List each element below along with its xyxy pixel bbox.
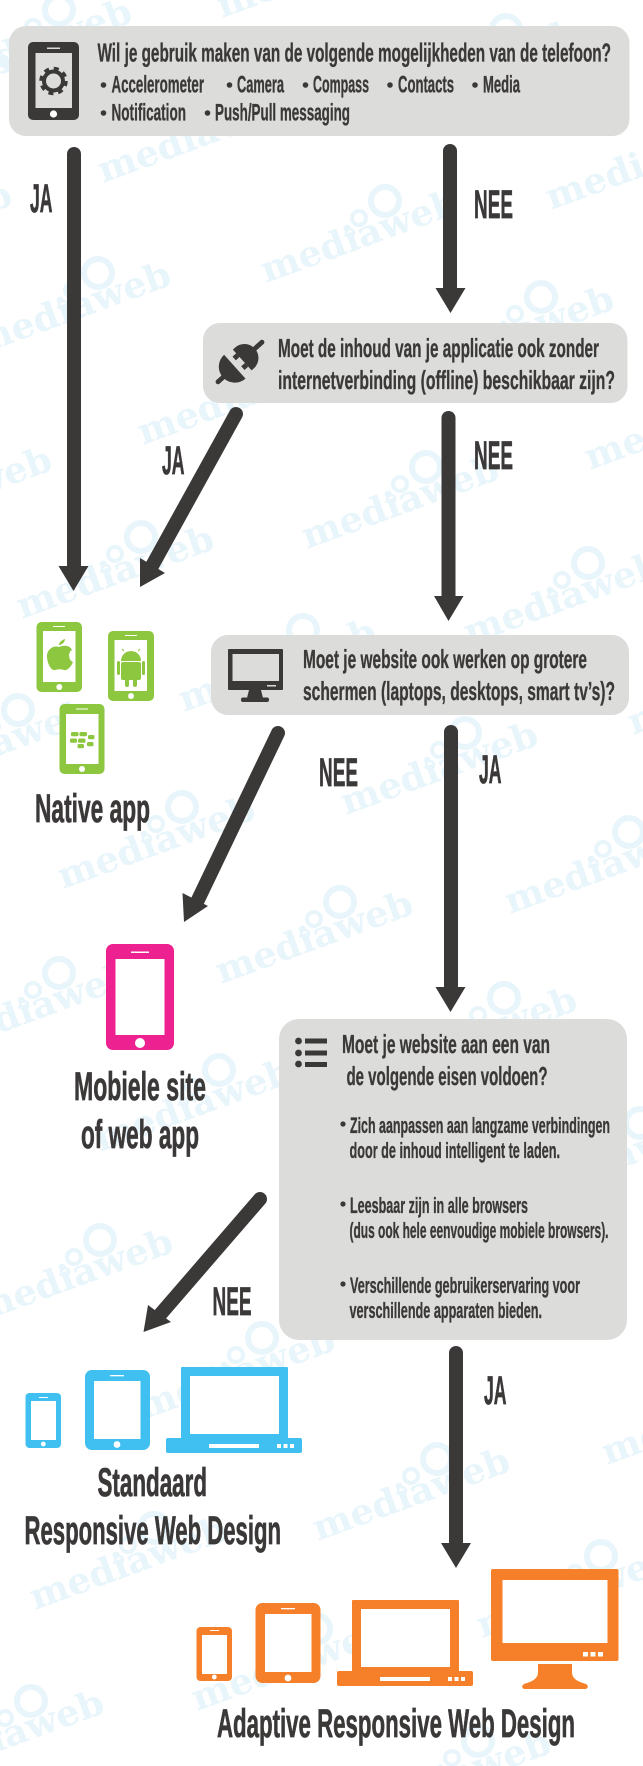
text: larger screens question — [303, 644, 615, 706]
label: Mobiele site of web app — [74, 1065, 206, 1157]
panel: phone features question — [9, 26, 630, 136]
text: JA — [484, 1369, 506, 1413]
arrow: JA to requirements question — [436, 725, 466, 1012]
group: standard responsive web design — [24, 1367, 302, 1553]
watermark pattern: mediaweb logos: mediaweb — [376, 10, 585, 120]
label: Standaard Responsive Web Design — [24, 1461, 281, 1553]
watermark pattern: mediaweb logos: mediaweb — [92, 81, 301, 191]
panel: offline question — [203, 323, 628, 403]
watermark pattern: mediaweb logos: mediaweb — [255, 181, 464, 291]
icon: blue phone — [26, 1393, 61, 1448]
arrow: NEE diagonal to mobile site — [182, 733, 278, 922]
icon: list — [295, 1038, 327, 1067]
icon: BlackBerry phone — [60, 704, 104, 774]
watermark pattern: mediaweb logos: mediaweb — [89, 1050, 298, 1160]
label: Standaard Responsive Web Design: Responsive Web Design — [24, 1509, 281, 1553]
watermark pattern: mediaweb logos: mediaweb — [307, 1439, 516, 1549]
panel: requirements question — [279, 1019, 627, 1340]
icon: orange tablet — [256, 1603, 320, 1683]
watermark pattern: mediaweb logos: mediaweb — [411, 277, 620, 387]
icon: blue tablet — [85, 1370, 150, 1450]
icon: plug — [206, 329, 274, 395]
text: NEE — [474, 183, 513, 227]
group: native app — [35, 622, 154, 831]
text: requirement slow connections — [340, 1113, 610, 1163]
text: requirement different experience — [340, 1273, 580, 1323]
arrow: NEE diagonal to standard responsive — [144, 1199, 260, 1332]
list: phone features: Camera — [237, 72, 284, 99]
icon: orange phone — [196, 1627, 232, 1681]
watermark pattern: mediaweb logos: mediaweb — [52, 787, 261, 897]
list: phone features: Accelerometer — [112, 72, 204, 99]
text: requirement all browsers — [340, 1193, 608, 1243]
text: JA — [479, 748, 502, 792]
watermark pattern: mediaweb logos: mediaweb — [186, 1609, 395, 1719]
arrow: JA diagonal to native app — [140, 414, 236, 587]
arrow: NEE to screens question — [434, 411, 464, 621]
icon: phone with gear — [28, 42, 79, 120]
label: Mobiele site of web app: of web app — [81, 1113, 199, 1157]
heading: requirements question — [342, 1029, 550, 1091]
watermark pattern: mediaweb logos: mediaweb — [24, 1508, 233, 1618]
text: NEE — [212, 1280, 252, 1324]
text: NEE — [319, 751, 358, 795]
watermark pattern: mediaweb logos: mediaweb — [210, 882, 419, 992]
list: phone features: Contacts — [398, 72, 454, 99]
watermark pattern: mediaweb logos: mediaweb — [11, 517, 220, 627]
list: phone features: Compass — [313, 72, 369, 99]
watermark pattern: mediaweb logos: mediaweb — [132, 343, 341, 453]
icon: blue laptop — [166, 1367, 302, 1453]
label: Standaard Responsive Web Design: Standaard — [98, 1461, 207, 1505]
icon: orange monitor — [491, 1569, 618, 1689]
text: JA — [30, 177, 52, 221]
text: NEE — [474, 434, 513, 478]
list: phone features: Notification — [112, 100, 186, 127]
icon: iPhone — [36, 622, 82, 692]
arrow: JA to adaptive responsive — [441, 1346, 471, 1568]
list: phone features: Media — [483, 72, 520, 99]
watermark pattern: mediaweb logos: mediaweb — [335, 713, 544, 823]
group: mobile site — [74, 944, 206, 1157]
icon: Android phone — [108, 631, 154, 701]
label: Native app: Native app — [35, 787, 150, 831]
label: Mobiele site of web app: Mobiele site — [74, 1065, 206, 1109]
icon: pink phone — [106, 944, 174, 1050]
list: phone features: Push/Pull messaging — [215, 100, 350, 127]
text: JA — [162, 439, 184, 483]
arrow: JA to native app — [58, 147, 88, 591]
watermark pattern: mediaweb logos: mediaweb — [173, 610, 382, 720]
arrow: NEE to offline question — [436, 144, 466, 313]
text: offline question — [278, 333, 615, 395]
watermark pattern: mediaweb logos: mediaweb — [374, 978, 583, 1088]
list: phone features — [101, 72, 520, 127]
icon: orange laptop — [337, 1600, 473, 1686]
watermark pattern: mediaweb logos: mediaweb — [132, 1318, 341, 1428]
watermark pattern: mediaweb logos: mediaweb — [296, 447, 505, 557]
icon: monitor — [228, 649, 283, 702]
group: adaptive responsive web design — [196, 1569, 618, 1746]
panel: larger screens question — [211, 635, 629, 715]
